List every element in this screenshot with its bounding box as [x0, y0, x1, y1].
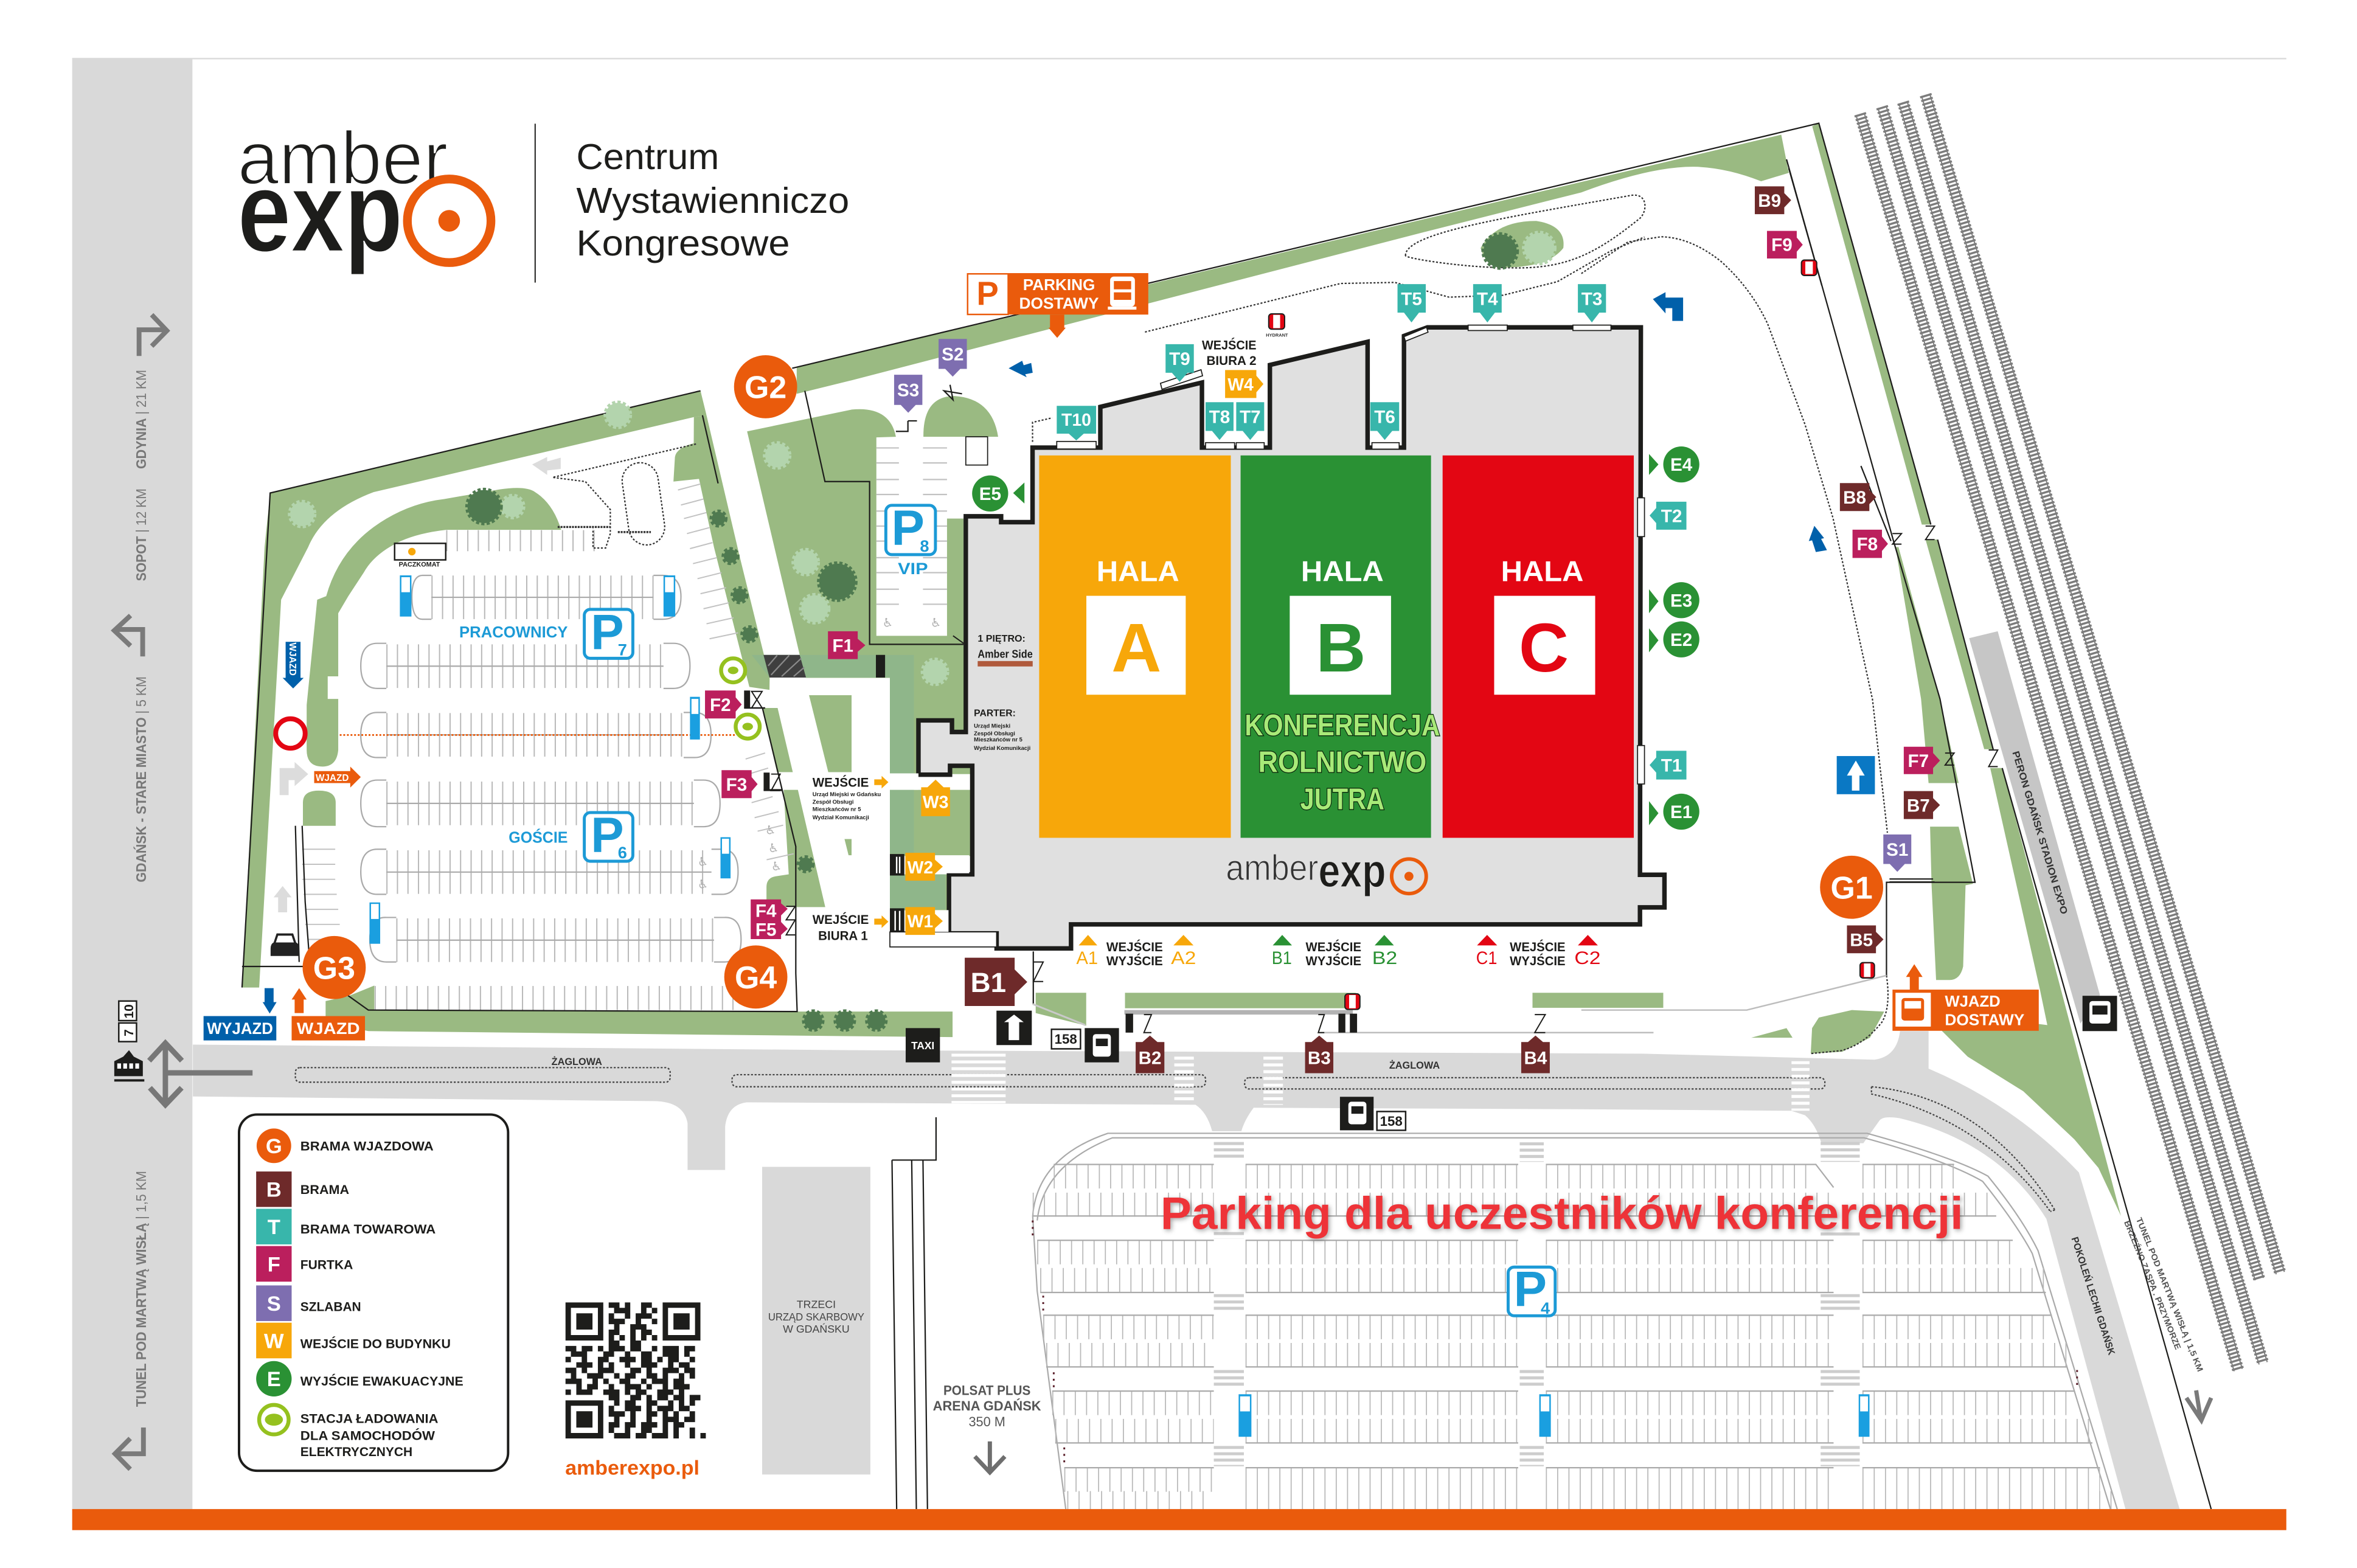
white entrance passages — [890, 773, 970, 932]
legend: brama wjazdowa — [257, 1128, 434, 1163]
hall A entrances: A2 — [1171, 948, 1196, 968]
hall B: B — [1316, 609, 1366, 687]
light grey up arrow — [274, 886, 291, 912]
marker G4 — [724, 945, 787, 1008]
road arrows in green-grey — [532, 457, 561, 475]
wheelchair symbols: ♿ — [771, 860, 782, 873]
small wjazd arrow — [314, 766, 361, 788]
car icon — [271, 934, 299, 956]
marker W3 — [921, 780, 950, 816]
street name Pokoleń Lechii Gdańsk: POKOLEŃ LECHII GDAŃSK — [2069, 1235, 2117, 1356]
marker B7 — [1904, 791, 1940, 819]
main entrance label: Zespół Obsługi — [813, 798, 853, 805]
dashed delivery routes — [552, 195, 1887, 833]
marker B2 — [1136, 1036, 1164, 1073]
hall C entrances — [1476, 935, 1600, 968]
heading: Kongresowe — [577, 223, 790, 263]
delivery entry sign: DOSTAWY — [1945, 1011, 2024, 1029]
legend: wyjście ewakuacyjne: WYJŚCIE EWAKUACYJNE — [300, 1374, 463, 1389]
marker B3: B3 — [1308, 1049, 1331, 1069]
hall B entrances: WYJŚCIE — [1306, 953, 1361, 968]
bus stop 158 south: 158 — [1380, 1114, 1403, 1129]
marker G2: G2 — [745, 369, 786, 404]
parking sign P8: 8 — [920, 536, 929, 555]
marker W1: W1 — [908, 912, 933, 932]
marker T9: T9 — [1169, 349, 1190, 369]
building outline — [918, 327, 1664, 948]
marker B5: B5 — [1850, 930, 1873, 950]
legend: charging station: STACJA ŁADOWANIA — [300, 1412, 438, 1426]
marker G4: G4 — [735, 960, 777, 995]
marker E1: E1 — [1670, 802, 1692, 822]
wheelchair symbols: ♿ — [698, 855, 708, 869]
marker F2: F2 — [710, 695, 731, 715]
marker G1 — [1820, 856, 1883, 919]
marker T1: T1 — [1661, 756, 1682, 776]
marker F7: F7 — [1908, 751, 1929, 771]
legend: charging station — [259, 1405, 438, 1459]
hall A entrances: WEJŚCIE — [1106, 939, 1163, 954]
parking sign P8 — [886, 501, 936, 556]
floor info: Zespół Obsługi — [974, 730, 1015, 737]
direction: Gdynia and Sopot: SOPOT | 12 KM — [133, 488, 149, 581]
marker T2 — [1650, 502, 1687, 530]
marker B1 — [965, 958, 1027, 1006]
taxi sign — [906, 1028, 940, 1063]
hatched service passage — [763, 655, 806, 678]
barriers — [896, 385, 962, 431]
hall A: HALA — [1097, 555, 1179, 587]
marker S1: S1 — [1886, 840, 1908, 860]
building logo: exp — [1318, 845, 1386, 897]
bus stop 158 north: 158 — [1055, 1032, 1077, 1047]
tunnel note near railway: TUNEL POD MARTWĄ WISŁĄ | 1,5 KM — [2134, 1216, 2206, 1373]
marker E4: E4 — [1670, 455, 1693, 475]
marker E2 — [1649, 622, 1699, 657]
parking sign P4: 4 — [1541, 1299, 1550, 1317]
floor info: Amber Side — [977, 648, 1033, 661]
hall B: HALA — [1301, 555, 1384, 587]
parking labels: PRACOWNICY — [459, 624, 568, 641]
road medians — [296, 1067, 2055, 1212]
direction: Gdynia and Sopot: GDYNIA | 21 KM — [133, 370, 149, 469]
marker W2: W2 — [908, 858, 933, 878]
marker T4: T4 — [1477, 290, 1498, 310]
marker E3 — [1649, 582, 1699, 618]
parking delivery sign — [968, 273, 1148, 338]
parking sign P6 — [585, 808, 633, 863]
hall C entrances: C2 — [1574, 948, 1600, 968]
junction arrow — [149, 1043, 252, 1105]
marker B4: B4 — [1524, 1049, 1547, 1069]
parking delivery sign: DOSTAWY — [1019, 296, 1099, 313]
delivery entry sign: WJAZD — [1945, 993, 2001, 1010]
marker T6: T6 — [1374, 407, 1395, 427]
building logo: amber — [1226, 847, 1318, 888]
marker S1 — [1883, 834, 1911, 872]
marker F3 — [721, 770, 758, 798]
Trzeci Urząd Skarbowy block: W GDAŃSKU — [783, 1323, 850, 1335]
legend: szlaban — [256, 1285, 361, 1321]
delivery entry sign — [1892, 964, 2039, 1031]
marker T6 — [1370, 402, 1399, 440]
Polsat Plus Arena direction: ARENA GDAŃSK — [933, 1398, 1041, 1414]
parking sign P7: P — [591, 605, 624, 661]
marker W3: W3 — [923, 793, 948, 813]
hall B entrances: B2 — [1372, 948, 1397, 968]
marker W1 — [905, 907, 943, 935]
parking labels: VIP — [898, 559, 928, 578]
left grey road band — [72, 58, 192, 1511]
conference parking heading: Parking dla uczestników konferencji — [1161, 1187, 1963, 1238]
marker B8 — [1840, 483, 1876, 511]
logo — [238, 117, 491, 276]
marker G3: G3 — [313, 950, 355, 985]
hydrant caption: HYDRANT — [1266, 333, 1288, 338]
legend: szlaban: S — [267, 1292, 281, 1316]
parking P7 and P6 rows — [361, 541, 741, 998]
direction: Gdynia and Sopot — [133, 314, 167, 581]
railway tracks — [1856, 94, 2285, 1372]
tunnel note near railway: BRZEŹNO ZASPA . PRZYMORZE — [2122, 1219, 2183, 1351]
marker E1 — [1649, 794, 1699, 830]
marker T9 — [1165, 344, 1194, 382]
marker T10: T10 — [1061, 411, 1091, 430]
parking sign P6: P — [591, 808, 624, 863]
hydrant centres — [1273, 262, 1870, 1008]
marker E3: E3 — [1670, 591, 1692, 611]
logo: amber — [238, 117, 448, 201]
conference label on hall B: ROLNICTWO — [1258, 746, 1426, 779]
parking sign P8: P — [891, 501, 925, 556]
marker F1 — [828, 631, 866, 659]
marker B4 — [1521, 1036, 1550, 1073]
marker T7 — [1236, 402, 1264, 440]
exit and entry signs — [204, 988, 365, 1041]
charging stations — [721, 658, 760, 738]
parking sign P6: 6 — [618, 843, 627, 862]
marker E4 — [1649, 446, 1699, 482]
marker T5 — [1398, 284, 1426, 322]
marker F7 — [1904, 747, 1940, 774]
marker B9 — [1755, 186, 1791, 214]
platform — [1969, 631, 2100, 1024]
legend: brama towarowa: BRAMA TOWAROWA — [300, 1223, 436, 1237]
light grey turn arrow — [280, 762, 308, 795]
marker E5 — [972, 476, 1024, 512]
heading — [577, 136, 849, 263]
legend: wejście do budynku — [256, 1323, 451, 1358]
taxi sign: TAXI — [911, 1039, 934, 1052]
marker E2: E2 — [1670, 630, 1692, 650]
marker F4 F5: F4 — [755, 901, 777, 921]
legend: brama: B — [266, 1179, 282, 1202]
station icon — [2083, 996, 2117, 1031]
hall A entrances — [1076, 935, 1196, 968]
marker F1: F1 — [832, 636, 853, 656]
Polsat Plus Arena direction: POLSAT PLUS — [943, 1382, 1030, 1398]
marker B8: B8 — [1843, 488, 1866, 508]
floor info: Urząd Miejski — [974, 723, 1010, 729]
legend: brama towarowa: T — [268, 1216, 280, 1239]
legend: furtka: F — [268, 1254, 280, 1277]
hall B entrances — [1272, 935, 1397, 968]
marker F8: F8 — [1857, 534, 1878, 554]
marker F3: F3 — [726, 775, 747, 795]
small wjazd arrow: WJAZD — [316, 773, 349, 783]
floor info: Wydział Komunikacji — [974, 744, 1030, 751]
blue direction arrows — [1008, 292, 1827, 552]
tram icon and lines: 7 — [122, 1029, 136, 1036]
Polsat Plus Arena direction: 350 M — [968, 1414, 1005, 1429]
marker T10 — [1057, 406, 1096, 440]
trees — [290, 233, 1554, 1030]
hall C: C — [1519, 609, 1569, 687]
blue vertical wyjazd arrow: WJAZD — [287, 642, 297, 676]
parcel locker — [395, 543, 446, 568]
hall C — [1443, 456, 1634, 838]
conference label on hall B: KONFERENCJA — [1244, 709, 1440, 742]
heading: Centrum — [577, 136, 719, 177]
marker W2 — [905, 853, 943, 881]
marker S3: S3 — [897, 381, 919, 401]
marker F9: F9 — [1771, 235, 1793, 255]
bus stop 158 north — [1052, 1028, 1119, 1063]
marker B1: B1 — [971, 967, 1006, 998]
marker S3 — [894, 375, 922, 413]
exit and entry signs: WYJAZD — [207, 1019, 273, 1038]
hall B — [1241, 456, 1431, 838]
street name Żaglowa east: ŻAGLOWA — [1389, 1060, 1440, 1071]
parking sign P7 — [585, 605, 633, 661]
marker S2: S2 — [942, 345, 963, 365]
legend panel — [239, 1114, 508, 1471]
marker B7: B7 — [1907, 796, 1930, 816]
road: Żaglowa and branches — [193, 1031, 2179, 1509]
one-way sign — [1837, 756, 1875, 794]
marker F2 — [705, 690, 741, 718]
wheelchair symbols — [698, 617, 941, 892]
blue vertical wyjazd arrow — [283, 642, 304, 689]
hall C entrances: WYJŚCIE — [1510, 953, 1566, 968]
direction: tunnel: TUNEL POD MARTWĄ WISŁĄ | 1,5 KM — [133, 1171, 149, 1407]
marker G1: G1 — [1831, 870, 1873, 905]
exit and entry signs: WJAZD — [297, 1019, 360, 1038]
marker T3 — [1578, 284, 1606, 322]
hall C entrances: WEJŚCIE — [1510, 939, 1566, 954]
direction: Gdańsk Stare Miasto: GDAŃSK - STARE MIASTO | 5 KM — [133, 676, 149, 883]
floor info: 1 PIĘTRO: — [977, 633, 1026, 644]
direction: Gdańsk Stare Miasto — [114, 616, 149, 883]
main entrance label: Mieszkańców nr 5 — [813, 806, 861, 813]
platform label: PERON GDAŃSK STADION EXPO — [2010, 750, 2070, 915]
hall A — [1039, 456, 1231, 838]
floor info — [974, 633, 1033, 751]
parking P4 lot — [1033, 1133, 2117, 1509]
marker F4 F5: F5 — [755, 920, 776, 940]
logo: exp — [238, 148, 403, 276]
angled parking ticks along tree strip — [302, 484, 794, 940]
floor info: Mieszkańców nr 5 — [974, 736, 1022, 743]
legend: wejście do budynku: W — [264, 1330, 284, 1353]
tram icon and lines — [114, 1001, 144, 1081]
hall B entrances: WEJŚCIE — [1306, 939, 1361, 954]
marker W4 — [1225, 370, 1263, 398]
parcel locker: PACZKOMAT — [399, 561, 440, 568]
main entrance label — [813, 774, 889, 820]
marker T7: T7 — [1240, 407, 1261, 427]
parking sign P4: P — [1514, 1262, 1547, 1317]
marker B3 — [1305, 1036, 1333, 1073]
parking sign P7: 7 — [618, 640, 627, 659]
parking P8 VIP ticks — [876, 448, 947, 604]
marker T5: T5 — [1401, 290, 1422, 310]
heading: Wystawienniczo — [577, 180, 849, 221]
main entrance label: WEJŚCIE — [813, 774, 869, 789]
marker B9: B9 — [1758, 191, 1781, 211]
marker B5 — [1847, 926, 1884, 953]
conference label on hall B: JUTRA — [1300, 782, 1384, 816]
marker F4 F5 — [751, 900, 788, 940]
pay machines — [369, 575, 1870, 1437]
parking delivery sign: PARKING — [1023, 277, 1095, 294]
direction: tunnel — [115, 1171, 149, 1469]
marker G3 — [303, 936, 366, 999]
legend: brama: BRAMA — [300, 1183, 349, 1197]
office 1 entrance label — [813, 912, 889, 943]
entrance WEJŚCIE BIURA 2: WEJŚCIE — [1202, 338, 1257, 353]
site boundary lines — [242, 123, 2211, 1509]
legend: brama towarowa — [256, 1209, 436, 1244]
Polsat Plus Arena direction — [933, 1382, 1041, 1473]
marker W4: W4 — [1227, 375, 1254, 395]
marker T3: T3 — [1581, 290, 1602, 310]
legend: wejście do budynku: WEJŚCIE DO BUDYNKU — [300, 1337, 451, 1351]
QR code — [566, 1302, 706, 1438]
legend: charging station: ELEKTRYCZNYCH — [300, 1445, 412, 1459]
building logo — [1226, 845, 1426, 897]
marker F8 — [1853, 530, 1888, 558]
lines east and south fences — [242, 159, 1975, 1509]
green areas — [242, 123, 2121, 1216]
hall A entrances: WYJŚCIE — [1106, 953, 1163, 968]
wheelchair symbols: ♿ — [698, 878, 708, 892]
legend: charging station: DLA SAMOCHODÓW — [300, 1428, 435, 1443]
legend: brama wjazdowa: BRAMA WJAZDOWA — [300, 1139, 434, 1153]
parking labels — [459, 559, 928, 847]
hall C: HALA — [1501, 555, 1583, 587]
main entrance label: Urząd Miejski w Gdańsku — [813, 791, 881, 797]
arrow south-east — [2186, 1390, 2211, 1420]
marker G2 — [734, 355, 797, 418]
hydrant icons — [1269, 260, 1875, 1010]
road crossings — [979, 1053, 1800, 1111]
wheelchair symbols: ♿ — [768, 842, 779, 855]
office 1 entrance label: BIURA 1 — [818, 928, 868, 943]
door strips on building — [890, 325, 1645, 947]
marker T8 — [1206, 402, 1234, 440]
parking labels: GOŚCIE — [509, 828, 568, 847]
legend: furtka — [256, 1246, 353, 1282]
bus stop 158 south — [1340, 1097, 1406, 1130]
marker B2: B2 — [1139, 1049, 1161, 1069]
tram icon and lines: 10 — [122, 1004, 136, 1019]
hall A entrances: A1 — [1076, 948, 1098, 968]
legend: brama — [256, 1171, 349, 1207]
marker T2: T2 — [1661, 507, 1682, 527]
parking delivery sign: P — [977, 276, 999, 313]
marker F9 — [1767, 231, 1803, 258]
gate icons — [744, 526, 1998, 1033]
hall A: A — [1111, 609, 1161, 687]
marker T4 — [1473, 284, 1502, 322]
legend: brama wjazdowa: G — [266, 1135, 282, 1158]
marker T8: T8 — [1209, 407, 1230, 427]
main entrance label: Wydział Komunikacji — [813, 814, 869, 820]
hall B entrances: B1 — [1272, 948, 1292, 968]
legend: furtka: FURTKA — [300, 1258, 353, 1272]
bottom orange bar — [72, 1509, 2286, 1530]
legend: szlaban: SZLABAN — [300, 1300, 361, 1314]
wheelchair symbols: ♿ — [931, 617, 941, 630]
hall C entrances: C1 — [1476, 948, 1497, 968]
marker S2 — [939, 339, 967, 376]
Trzeci Urząd Skarbowy block — [762, 1167, 870, 1474]
stop sign and charging line — [276, 719, 737, 748]
info post icon — [996, 1011, 1032, 1045]
wheelchair symbols: ♿ — [883, 617, 893, 630]
marker T1 — [1650, 751, 1687, 780]
wheelchair symbols: ♿ — [765, 824, 776, 838]
entrance WEJŚCIE BIURA 2: BIURA 2 — [1206, 353, 1257, 368]
Trzeci Urząd Skarbowy block: URZĄD SKARBOWY — [768, 1311, 864, 1323]
legend: wyjście ewakuacyjne — [256, 1361, 463, 1396]
conference label on hall B — [1244, 709, 1440, 816]
floor info: PARTER: — [974, 707, 1016, 718]
Trzeci Urząd Skarbowy block: TRZECI — [797, 1298, 836, 1310]
legend: wyjście ewakuacyjne: E — [267, 1368, 281, 1391]
entrance WEJŚCIE BIURA 2 — [1202, 338, 1257, 368]
office 1 entrance label: WEJŚCIE — [813, 912, 869, 927]
marker E5: E5 — [979, 484, 1001, 504]
street name Żaglowa west: ŻAGLOWA — [552, 1056, 602, 1067]
website: amberexpo.pl — [565, 1457, 699, 1479]
